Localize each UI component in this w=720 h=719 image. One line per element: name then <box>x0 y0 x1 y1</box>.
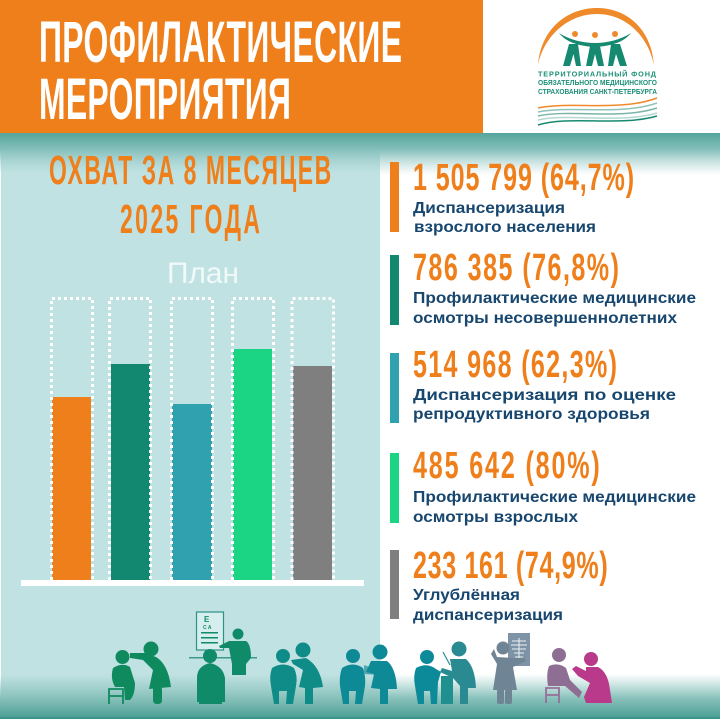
bar: in-depth <box>293 366 332 580</box>
plan outlines <box>52 298 334 580</box>
bar: adult screening <box>52 397 91 580</box>
title: ПРОФИЛАКТИЧЕСКИЕ <box>39 10 402 74</box>
legend item 5: Углублённая <box>413 587 520 604</box>
icon: x-ray <box>491 633 530 704</box>
legend item 2: 786 385 (76,8%) <box>413 246 619 288</box>
icon: throat check <box>270 642 323 704</box>
legend item 5: 233 161 (74,9%) <box>413 544 608 586</box>
subtitle <box>49 148 331 243</box>
subtitle: ОХВАТ ЗА 8 МЕСЯЦЕВ <box>49 148 331 194</box>
logo: СТРАХОВАНИЯ САНКТ-ПЕТЕРБУРГА <box>538 87 658 96</box>
legend item 2 <box>390 246 696 327</box>
legend item 1: взрослого населения <box>414 219 596 236</box>
legend item 2: Профилактические медицинские <box>413 290 696 307</box>
legend item 3 <box>390 343 676 423</box>
subtitle: 2025 ГОДА <box>120 197 260 243</box>
icons: medical examinations row <box>109 612 612 704</box>
legend item 4 <box>390 444 696 526</box>
bar: reproductive <box>172 404 212 580</box>
icon: vision chart: C A <box>203 625 212 631</box>
bar chart <box>21 257 364 586</box>
plan label: План <box>167 257 239 290</box>
logo: ТЕРРИТОРИАЛЬНЫЙ ФОНД <box>538 70 657 78</box>
bar: adult checkups <box>233 349 272 580</box>
logo: ОБЯЗАТЕЛЬНОГО МЕДИЦИНСКОГО <box>538 78 657 87</box>
legend item 1 <box>390 156 634 236</box>
title <box>39 10 402 131</box>
baseline <box>21 580 364 586</box>
legend item 3: Диспансеризация по оценке <box>413 387 676 404</box>
legend item 4: Профилактические медицинские <box>413 489 696 506</box>
icon: vision chart <box>189 612 257 704</box>
legend item 4: осмотры взрослых <box>413 509 578 526</box>
title: МЕРОПРИЯТИЯ <box>39 67 291 131</box>
legend item 5: диспансеризация <box>413 607 563 624</box>
icon: knee reflex <box>546 648 612 703</box>
legend item 4: 485 642 (80%) <box>413 444 600 486</box>
legend item 5 <box>390 544 608 624</box>
legend item 1: Диспансеризация <box>413 200 565 217</box>
legend item 1: 1 505 799 (64,7%) <box>413 156 634 198</box>
icon: stethoscope <box>340 644 397 704</box>
icon: injection <box>414 642 476 704</box>
header band <box>0 0 483 133</box>
legend item 3: 514 968 (62,3%) <box>413 343 617 385</box>
logo <box>538 8 658 125</box>
legend item 2: осмотры несовершеннолетних <box>413 310 677 327</box>
icon: eye check <box>109 642 171 704</box>
legend item 3: репродуктивного здоровья <box>413 406 650 423</box>
icon: vision chart: E <box>204 615 210 624</box>
bar: minors <box>111 364 150 580</box>
